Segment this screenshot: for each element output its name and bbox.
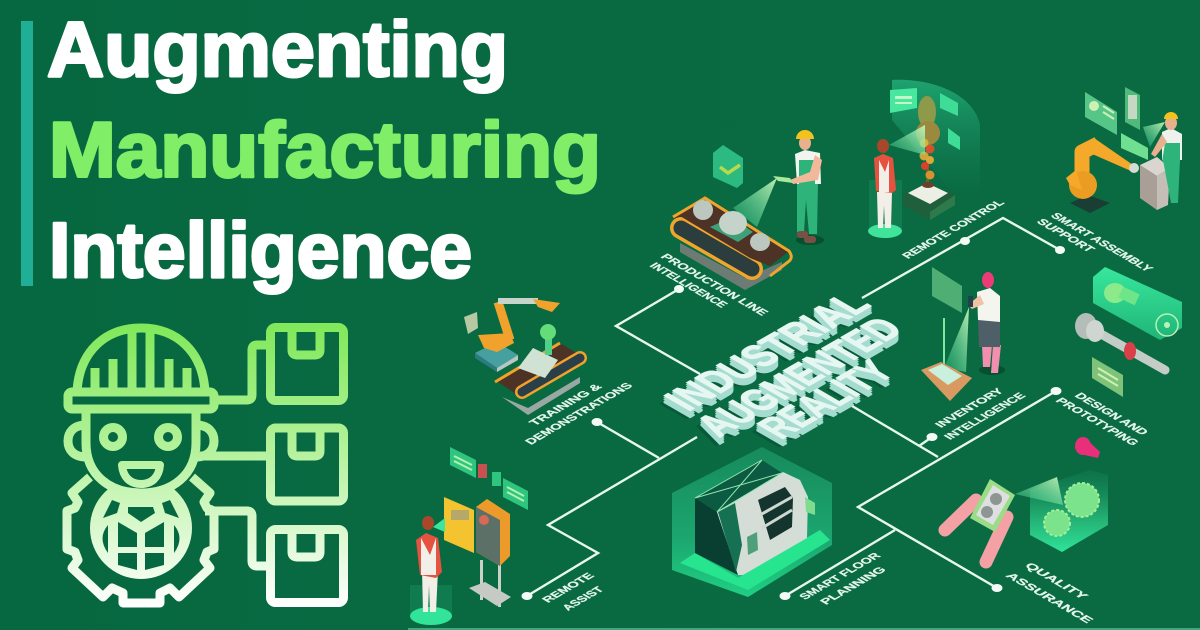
central heading: Industrial Augmented Reality: INDUSTRIAL (654, 286, 881, 417)
conveyor (495, 343, 585, 415)
label: inventory intelligence: INVENTORY (933, 387, 1007, 430)
icon: bottom box (270, 530, 344, 602)
robot arm (464, 299, 560, 352)
hologram panel (1093, 267, 1182, 340)
title (47, 5, 601, 294)
scan pole (943, 318, 945, 372)
illustration: inventory (921, 267, 1005, 401)
label: production line intelligence: PRODUCTION LINE (657, 252, 770, 318)
label: smart floor planning: SMART FLOOR (797, 551, 884, 602)
illustration: production line (671, 130, 824, 290)
scan beam (1015, 477, 1063, 505)
plant base (903, 182, 955, 220)
label: remote assist: REMOTE (540, 571, 598, 605)
label: smart assembly support: SUPPORT (1033, 217, 1097, 254)
workpiece (518, 324, 558, 378)
illustration: remote control plant (868, 80, 980, 238)
illustration: smart assembly (1066, 87, 1182, 213)
accent bar (21, 21, 33, 286)
central heading: Industrial Augmented Reality (654, 286, 914, 445)
conveyor (671, 198, 791, 290)
robot base (475, 342, 518, 372)
illustration: design and prototyping (1075, 267, 1182, 397)
stand (469, 560, 511, 607)
label: production line intelligence: INTELLIGENCE (646, 261, 730, 310)
worker (773, 130, 824, 245)
icon: face (86, 409, 196, 493)
tablet (970, 479, 1015, 532)
label: training and demonstrations: DEMONSTRATIONS (523, 381, 636, 447)
bottom edge of illustration (408, 628, 1200, 630)
gaze beam (1143, 122, 1165, 147)
label: quality assurance: QUALITY (1021, 561, 1090, 601)
label: smart floor planning: PLANNING (818, 565, 889, 607)
label: inventory intelligence: INTELLIGENCE (942, 391, 1029, 442)
panels (1085, 87, 1148, 160)
labels (523, 198, 1155, 625)
hologram check panel (713, 145, 743, 188)
scan beam (944, 307, 969, 372)
woman (968, 272, 1005, 375)
machine body (695, 460, 815, 575)
gears (1044, 483, 1099, 536)
shaft (1075, 313, 1165, 370)
data panels (890, 88, 960, 150)
connector lines (522, 218, 1065, 600)
label: training and demonstrations: TRAINING & (527, 382, 605, 428)
icon: helmet (68, 328, 214, 409)
title: Manufacturing (49, 106, 601, 194)
label: quality assurance: ASSURANCE (1002, 571, 1095, 625)
label: remote assist: ASSIST (560, 585, 607, 613)
glowing floor (672, 447, 832, 597)
curved hologram (892, 80, 980, 195)
icon: ears (68, 425, 214, 457)
icon: globe (90, 477, 192, 579)
plant (916, 96, 940, 185)
illustration: remote assist (410, 447, 528, 625)
control stand (1140, 157, 1170, 210)
floor grid (680, 530, 830, 590)
hologram panel (932, 267, 962, 313)
label: quality assurance (1002, 561, 1095, 625)
title: Augmenting (47, 5, 508, 93)
part (1075, 437, 1100, 458)
icon: middle box (270, 428, 344, 501)
scan beam (733, 178, 777, 227)
icon: gear (67, 477, 214, 603)
data panel (1092, 357, 1123, 397)
panels (450, 447, 528, 510)
label: remote control: REMOTE CONTROL (900, 198, 1008, 261)
label: remote assist (540, 571, 607, 613)
box (921, 362, 972, 401)
title: Intelligence (49, 206, 472, 294)
illustration: smart floor machine (672, 447, 832, 597)
icon: worker with gear, globe and boxes (67, 328, 344, 603)
person (868, 139, 902, 238)
arms (945, 500, 1007, 562)
illustration: quality assurance (945, 437, 1108, 562)
label: smart assembly support: SMART ASSEMBLY (1047, 211, 1155, 274)
gaze beam (889, 125, 925, 155)
gaze beam (433, 518, 445, 532)
person (410, 516, 452, 625)
central heading: Industrial Augmented Reality: REALITY (747, 354, 905, 445)
central heading: Industrial Augmented Reality: AUGMENTED (685, 311, 914, 443)
icon: top box (270, 328, 344, 400)
label: design and prototyping: DESIGN AND (1071, 391, 1150, 437)
robot arm (1066, 138, 1139, 213)
illustration: training (464, 299, 585, 415)
label: design and prototyping: PROTOTYPING (1052, 396, 1141, 448)
worker (1151, 112, 1182, 203)
icon: connectors (200, 345, 270, 566)
cabinet (444, 497, 510, 566)
hologram cube (1030, 470, 1108, 552)
